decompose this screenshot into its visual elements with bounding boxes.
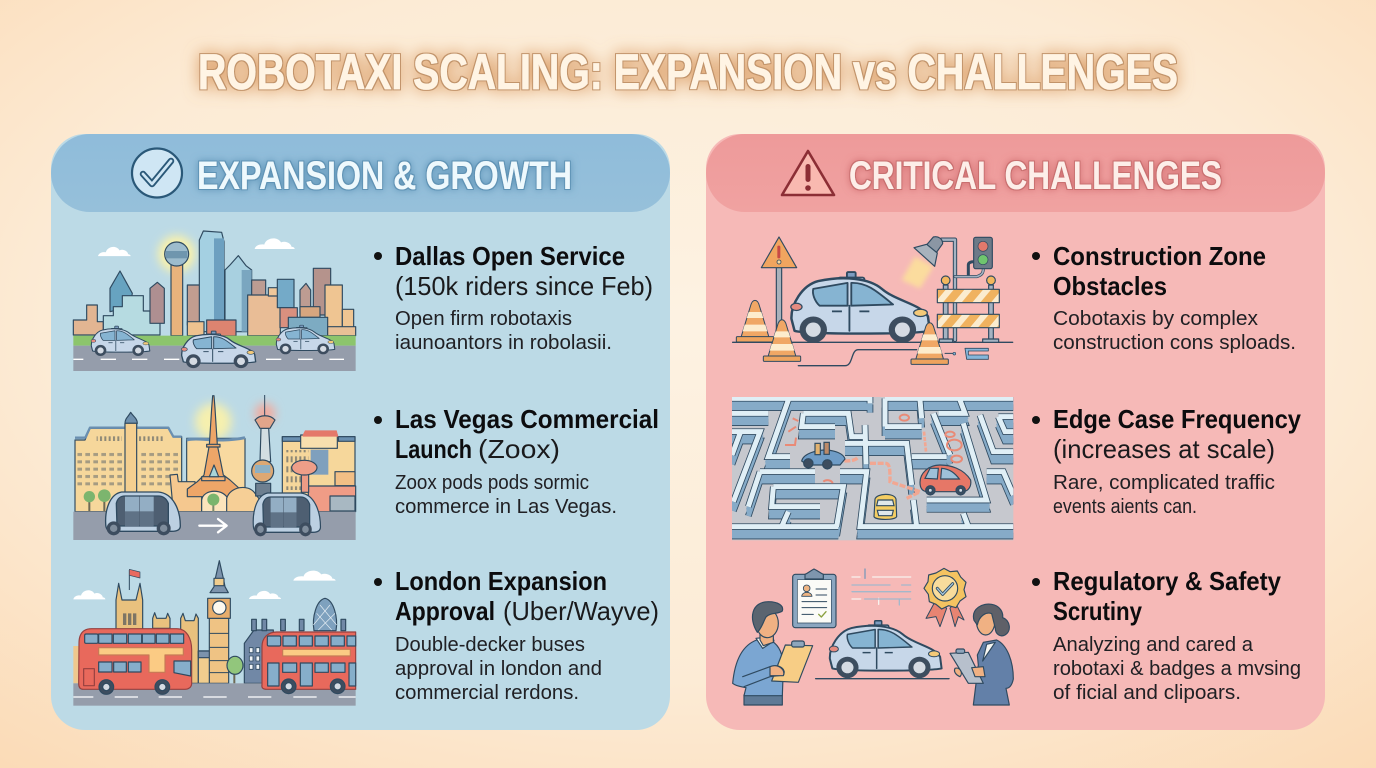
text: Las Vegas item: Las Vegas Commercial bbox=[395, 404, 659, 434]
text: London item: (Uber/Wayve) bbox=[503, 596, 659, 626]
text: Dallas item: Open firm robotaxis bbox=[395, 307, 572, 330]
text: Las Vegas item bbox=[374, 404, 659, 518]
text: Dallas item bbox=[374, 241, 653, 354]
text: regulatory item: of ficial and clipoars. bbox=[1053, 681, 1241, 704]
heading: critical challenges: CRITICAL CHALLENGES bbox=[849, 154, 1222, 198]
maze blue car bbox=[802, 442, 845, 469]
text: construction item: Cobotaxis by complex bbox=[1053, 307, 1259, 330]
maze red car bbox=[920, 465, 971, 495]
text: Las Vegas item: commerce in Las Vegas. bbox=[395, 495, 617, 518]
text: regulatory item: Analyzing and cared a bbox=[1053, 633, 1254, 656]
text: construction item: Construction Zone bbox=[1053, 241, 1266, 271]
text: regulatory item: robotaxi & badges a mvsing bbox=[1053, 657, 1301, 680]
text: London item: commercial rerdons. bbox=[395, 681, 579, 704]
text: London item: approval in london and bbox=[395, 657, 602, 680]
text: edge case item: (increases at scale) bbox=[1053, 434, 1275, 464]
illustration: regulators inspecting robotaxi bbox=[733, 568, 1013, 705]
text: regulatory item bbox=[1032, 566, 1301, 704]
text: regulatory item: Scrutiny bbox=[1053, 596, 1142, 626]
text: Dallas item: Dallas Open Service bbox=[395, 241, 625, 271]
text: Las Vegas item: Zoox pods pods sormic bbox=[395, 471, 589, 494]
text: construction item: construction cons sploads. bbox=[1053, 331, 1296, 354]
panel header: expansion bbox=[51, 134, 670, 212]
maze yellow car bbox=[874, 494, 897, 519]
illustration: Dallas skyline bbox=[73, 231, 356, 371]
text: edge case item: Rare, complicated traffic bbox=[1053, 471, 1275, 494]
text: Las Vegas item: Launch bbox=[395, 434, 472, 464]
text: Las Vegas item: (Zoox) bbox=[478, 434, 560, 464]
text: edge case item bbox=[1032, 404, 1301, 518]
panel header: challenges bbox=[706, 134, 1325, 212]
text: London item bbox=[374, 566, 659, 704]
text: London item: London Expansion bbox=[395, 566, 607, 596]
text: Dallas item: (150k riders since Feb) bbox=[395, 271, 653, 301]
illustration: construction zone bbox=[733, 237, 1013, 366]
text: regulatory item: Regulatory & Safety bbox=[1053, 566, 1281, 596]
text: London item: Double-decker buses bbox=[395, 633, 585, 656]
illustration: Las Vegas strip bbox=[73, 395, 356, 540]
text: construction item bbox=[1032, 241, 1296, 354]
text: London item: Approval bbox=[395, 596, 495, 626]
illustration: London skyline bbox=[73, 561, 356, 706]
text: edge case item: events aients can. bbox=[1053, 495, 1197, 518]
text: Dallas item: iaunoantors in robolasii. bbox=[395, 331, 612, 354]
icon: check circle bbox=[132, 148, 182, 198]
heading: expansion and growth: EXPANSION & GROWTH bbox=[197, 154, 572, 198]
text: construction item: Obstacles bbox=[1053, 271, 1167, 301]
icon: warning triangle bbox=[782, 151, 834, 195]
panel: critical challenges bbox=[706, 134, 1325, 730]
panel: expansion and growth bbox=[51, 134, 670, 730]
illustration: edge case maze bbox=[732, 397, 1013, 540]
text: edge case item: Edge Case Frequency bbox=[1053, 404, 1301, 434]
